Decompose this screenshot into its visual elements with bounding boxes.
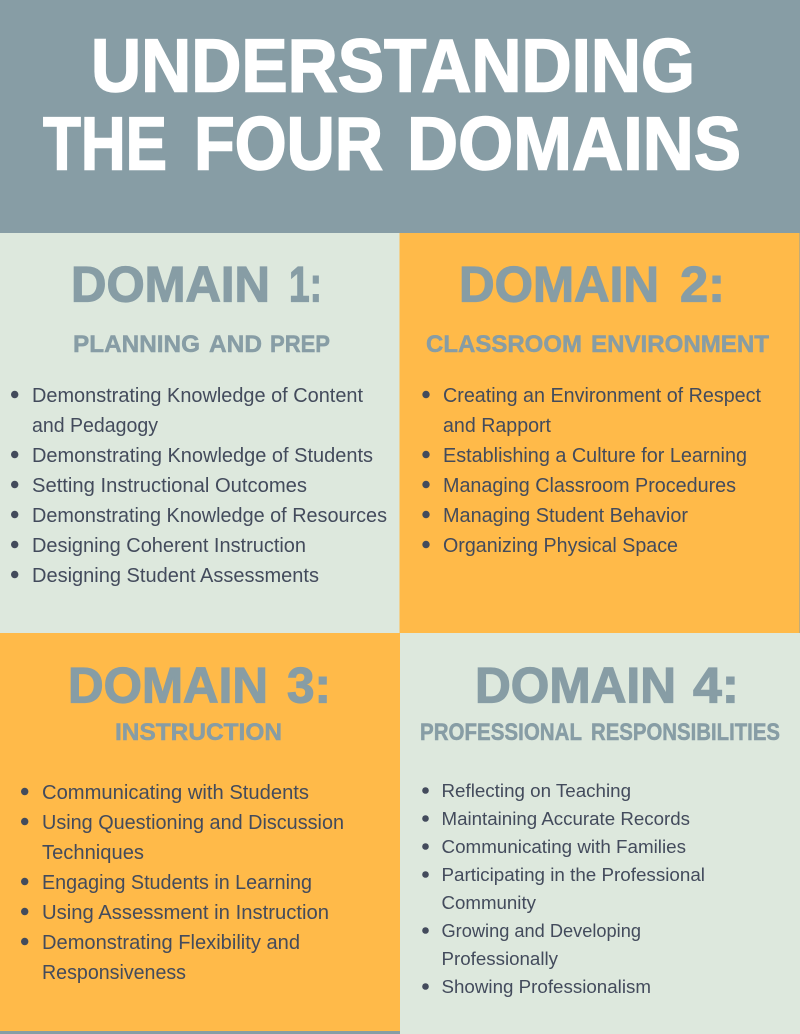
list: domain 2: and Rapport — [443, 415, 551, 437]
list: domain 3: Techniques — [42, 842, 144, 864]
subheading: professional responsibilities: PROFESSIONAL — [420, 719, 582, 746]
header panel — [0, 0, 800, 233]
list: domain 4: Participating in the Professional — [442, 864, 705, 885]
title: THE — [43, 102, 167, 186]
subheading: professional responsibilities — [420, 719, 780, 746]
list: domain 1 — [11, 385, 387, 587]
list: domain 4 — [422, 780, 705, 997]
heading: domain 4: 4: — [693, 658, 739, 714]
panel: domain 1 — [0, 233, 400, 633]
list: domain 3: Demonstrating Flexibility and — [42, 932, 300, 954]
heading: domain 3: 3: — [287, 658, 331, 714]
list: domain 4: Maintaining Accurate Records — [442, 808, 690, 829]
list: domain 4: Showing Professionalism — [442, 976, 651, 997]
list: domain 1: and Pedagogy — [32, 415, 158, 437]
list: domain 1: Demonstrating Knowledge of Resources — [32, 505, 387, 527]
subheading: instruction: INSTRUCTION — [115, 719, 282, 746]
list: domain 3: Using Questioning and Discussion — [42, 812, 344, 834]
list: domain 4: Communicating with Families — [442, 836, 686, 857]
list: domain 3: Responsiveness — [42, 962, 186, 984]
list: domain 2: Managing Classroom Procedures — [443, 475, 736, 497]
list: domain 1: Designing Student Assessments — [32, 565, 319, 587]
list: domain 1: Designing Coherent Instruction — [32, 535, 306, 557]
list: domain 2: Organizing Physical Space — [443, 535, 678, 557]
list: domain 3: Engaging Students in Learning — [42, 872, 312, 894]
heading: domain 1: DOMAIN — [71, 256, 270, 312]
title: DOMAINS — [407, 102, 741, 186]
heading: domain 3: DOMAIN — [68, 658, 268, 714]
subheading: planning and prep — [73, 331, 330, 358]
subheading: classroom environment: ENVIRONMENT — [591, 331, 769, 358]
title: FOUR — [194, 102, 383, 186]
list: domain 2: Managing Student Behavior — [443, 505, 688, 527]
subheading: planning and prep: PLANNING — [73, 331, 200, 358]
list: domain 4: Growing and Developing — [442, 920, 641, 941]
subheading: classroom environment — [426, 331, 769, 358]
panel: domain 4 — [400, 633, 800, 1034]
list: domain 3 — [21, 782, 344, 984]
subheading: classroom environment: CLASSROOM — [426, 331, 582, 358]
list: domain 4: Community — [442, 892, 537, 913]
heading: domain 2: 2: — [680, 256, 725, 312]
list: domain 2: Establishing a Culture for Learning — [443, 445, 747, 467]
list: domain 4: Professionally — [442, 948, 559, 969]
panel: domain 2 — [400, 233, 800, 633]
list: domain 1: Setting Instructional Outcomes — [32, 475, 307, 497]
list: domain 1: Demonstrating Knowledge of Students — [32, 445, 373, 467]
list: domain 4: Reflecting on Teaching — [442, 780, 631, 801]
title: UNDERSTANDING — [91, 24, 695, 108]
subheading: planning and prep: PREP — [270, 331, 330, 358]
list: domain 3: Using Assessment in Instruction — [42, 902, 329, 924]
list: domain 2 — [422, 385, 761, 557]
heading: domain 2: DOMAIN — [459, 256, 659, 312]
list: domain 3: Communicating with Students — [42, 782, 309, 804]
list: domain 1: Demonstrating Knowledge of Content — [32, 385, 363, 407]
heading: domain 4: DOMAIN — [475, 658, 676, 714]
heading: domain 1: 1: — [289, 256, 322, 312]
subheading: planning and prep: AND — [209, 331, 262, 358]
list: domain 2: Creating an Environment of Respect — [443, 385, 761, 407]
panel: domain 3 — [0, 633, 400, 1031]
title — [43, 24, 741, 186]
